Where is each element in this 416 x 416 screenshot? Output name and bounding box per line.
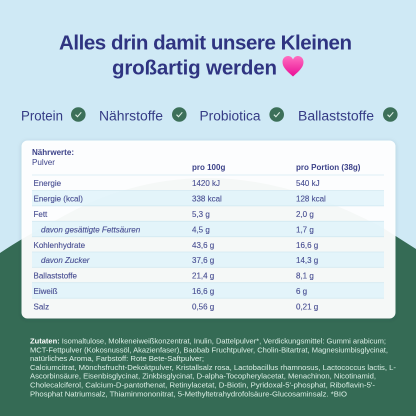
table rows: davon gesättigte Fettsäuren [41,226,141,234]
table rows: 16,6 g [296,241,318,250]
benefit: Probiotica: Probiotica [200,108,261,124]
table rows: 0,56 g [192,302,214,312]
ingredients text: Zutaten: Isomaltulose, Molkeneiweißkonzentrat, Inulin, Dattelpulver*, Verdickungsmittel: Gummi arabicum; [30,336,386,346]
table header: pro 100g [192,163,225,172]
table rows: 16,6 g [192,287,214,296]
table rows: 21,4 g [192,272,214,280]
table rows: Fett [34,210,48,219]
table rows: davon Zucker [41,256,90,265]
benefit: Nährstoffe: Nährstoffe [99,108,163,124]
table rows: 37,6 g [192,256,214,265]
ingredients text: Ascorbinsäure, Eisenbisglycinat, Zinkbisglycinat, D-alpha-Tocopherylacetat, Menachinon, Nicotinamid, [30,372,376,381]
table rows: 338 kcal [192,194,222,204]
ingredients text: Calciumcitrat, Mönchsfrucht-Dekoktpulver, Kristallsalz rosa, Lactobacillus rhamnosus, Lactococcus lactis, L- [30,363,397,372]
table header: Nährwerte: [32,148,74,157]
table rows: 43,6 g [192,241,214,250]
ingredients text: Cholecalciferol, Calcium-D-pantothenat, Retinylacetat, D-Biotin, Pyridoxal-5'-phosphat, Riboflavin-5'- [30,380,376,390]
table rows: 5,3 g [192,210,210,219]
table rows: Ballaststoffe [34,272,77,280]
table rows: 14,3 g [296,256,318,265]
card background [22,140,396,318]
benefit: Probiotica [200,107,284,124]
table rows: 0,21 g [296,302,318,312]
table header: pro Portion (38g) [296,163,361,172]
table rows: 128 kcal [296,194,326,204]
table rows: Salz [34,302,49,312]
table header [32,148,361,172]
title: großartig werden [112,56,277,80]
table header: Pulver [32,158,55,167]
table rows: Eiweiß [34,287,58,296]
benefit: Protein [21,107,86,124]
benefits row [21,107,398,124]
table rows: Energie (kcal) [34,194,83,204]
benefit: Nährstoffe [99,107,187,124]
ingredients text: Phosphat Natriumsalz, Thiaminmononitrat, 5-Methyltetrahydrofolsäure-Glucosaminsalz. *BIO [30,389,347,398]
table rows: Energie [34,179,62,188]
panel: nutrition table [22,140,396,318]
table rows: 4,5 g [192,226,210,234]
table rows: 6 g [296,287,307,296]
table rows [34,179,326,312]
table rows: 2,0 g [296,210,314,219]
benefit: Ballaststoffe [298,107,398,124]
ingredients text: MCT-Fettpulver (Kokosnussöl, Akazienfaser), Baobab Fruchtpulver, Cholin-Bitartrat, Magnesiumbisglycinat, [30,345,388,354]
table rows: 1,7 g [296,226,314,234]
table row stripes [32,190,384,298]
title [59,32,352,80]
table rows: 8,1 g [296,272,314,280]
benefit: Protein: Protein [21,108,63,124]
title: Alles drin damit unsere Kleinen [59,32,352,54]
table rows: Kohlenhydrate [34,241,86,250]
ingredients text: natürliches Aroma, Farbstoff: Rote Bete-Saftpulver; [30,354,204,363]
benefit: Ballaststoffe: Ballaststoffe [298,108,374,124]
ingredients text [30,336,397,398]
green hill background [0,178,416,416]
table rows: 540 kJ [296,179,320,188]
icon: pink heart [282,56,304,76]
table rows: 1420 kJ [192,179,220,188]
